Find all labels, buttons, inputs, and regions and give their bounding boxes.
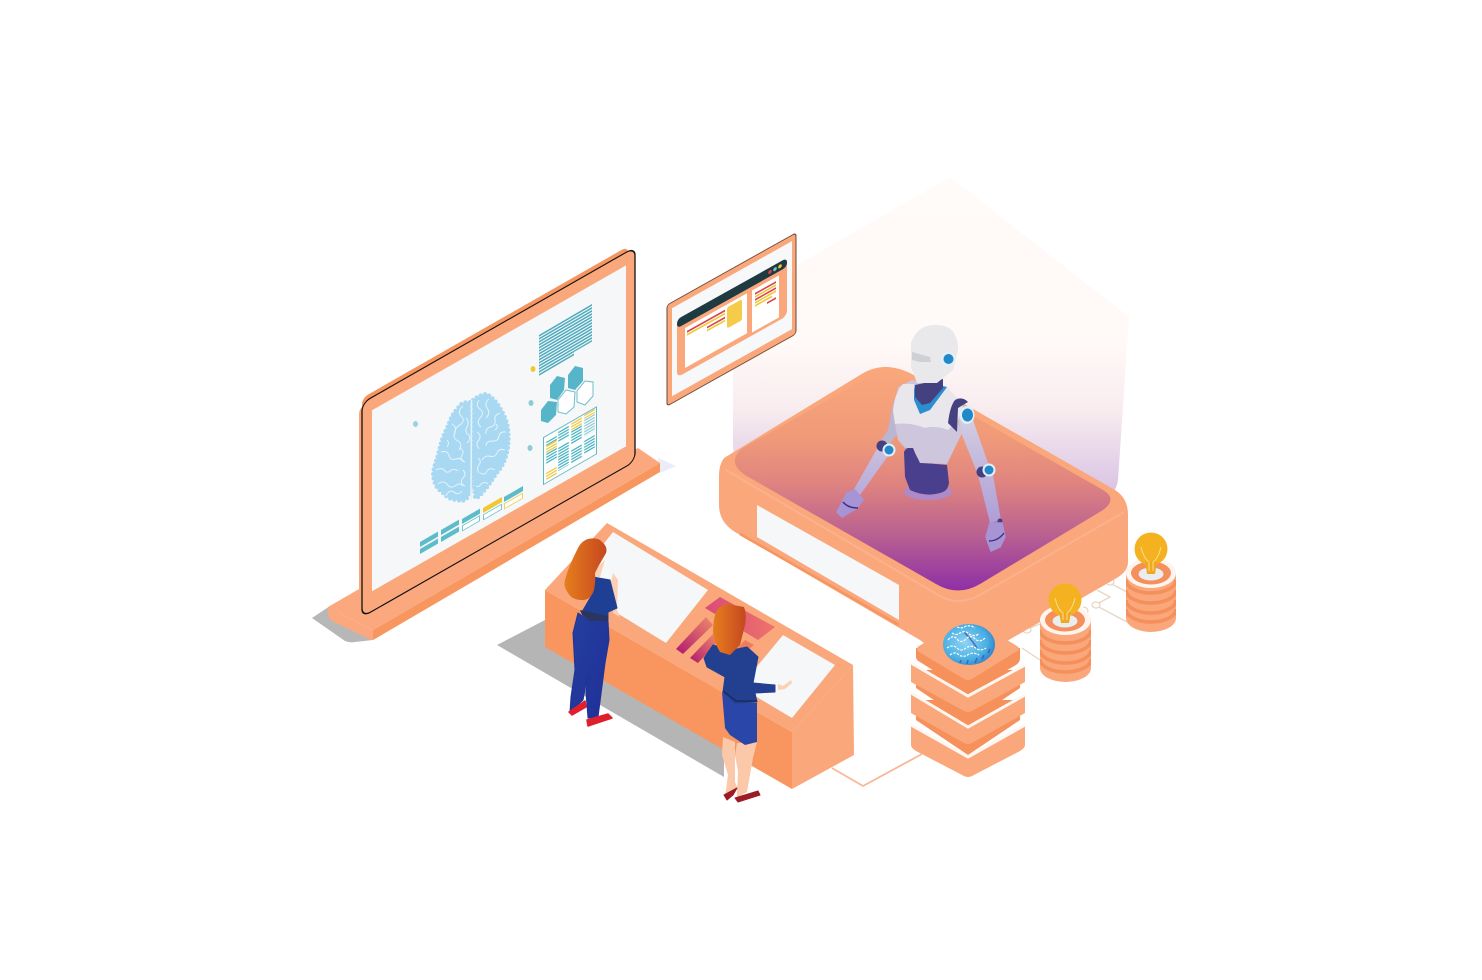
stand front side (373, 463, 660, 640)
desk central bars (676, 617, 754, 663)
window left card lines (687, 311, 725, 342)
robot right wrist (998, 518, 1002, 524)
monitor shadow (312, 606, 373, 642)
desk shadow (497, 620, 724, 777)
woman belt (723, 691, 757, 701)
woman legs (722, 737, 757, 798)
stack second layer (911, 663, 1025, 723)
woman top (582, 577, 617, 620)
stack brain model (943, 624, 995, 665)
monitor (359, 242, 635, 619)
window right content card (752, 275, 779, 332)
monitor hexagon cluster (541, 366, 593, 423)
bulb (1134, 532, 1168, 574)
woman shoes (569, 701, 612, 726)
monitor left outer edge (359, 396, 379, 613)
light bulb pedestal left (1040, 584, 1091, 682)
robot right hand (986, 523, 1005, 551)
stand top face (328, 448, 660, 630)
woman hand (778, 680, 792, 690)
monitor screen (372, 265, 626, 591)
connector line from desk to server stack (832, 754, 922, 786)
pedestal body (1040, 620, 1091, 682)
woman neck and face (593, 560, 605, 577)
light bulb pedestal right (1126, 532, 1176, 632)
display desk (545, 523, 854, 789)
robot left hand (837, 490, 863, 517)
robot elbow joints (876, 440, 996, 478)
hologram light box (733, 177, 1129, 590)
stack top side (916, 648, 1020, 691)
left brain lobe (433, 402, 471, 501)
robot (837, 325, 1005, 551)
woman belt (580, 610, 608, 621)
desk top face (545, 523, 853, 732)
pedestal stripes (1126, 580, 1176, 622)
woman shoes (724, 788, 760, 802)
woman trousers (570, 613, 609, 718)
stand left side (328, 607, 373, 640)
woman raised hand (610, 573, 620, 617)
monitor data table (544, 407, 596, 484)
panel: robot platform (719, 367, 1128, 668)
robot chest highlight (893, 384, 963, 430)
robot abdomen (904, 447, 949, 495)
monitor text block (566, 303, 593, 362)
window yellow note (727, 299, 742, 328)
window control buttons (768, 264, 782, 275)
illustration: isometric AI laboratory (312, 234, 1176, 802)
robot shoulder joint (948, 398, 974, 432)
woman skirt (722, 692, 757, 745)
monitor back edge (362, 246, 628, 428)
platform lower edge stripe (740, 534, 899, 625)
desk central card (705, 597, 775, 640)
stack bottom layer (911, 725, 1025, 777)
window left content card (685, 293, 747, 368)
window inner panel (677, 259, 787, 377)
robot left upper arm (880, 385, 903, 447)
pedestal body (1126, 573, 1176, 632)
bulb (1048, 584, 1082, 623)
woman at desk right (704, 604, 792, 802)
desk left screen (571, 532, 708, 643)
robot left forearm (853, 447, 890, 495)
floating browser window (667, 233, 796, 406)
circuit lines between bulbs and platform (1022, 579, 1127, 660)
monitor brain image (433, 394, 509, 501)
robot collar (914, 385, 947, 414)
woman hair (564, 538, 606, 600)
robot neck (915, 379, 943, 405)
window white area (672, 241, 792, 396)
robot head (911, 325, 958, 383)
stand side shadow (658, 458, 676, 473)
pedestal top ring (1126, 558, 1176, 588)
server stack (911, 618, 1025, 777)
right brain lobe (473, 394, 509, 498)
desk right face (792, 665, 854, 789)
robot visor (912, 352, 931, 362)
desk front face (545, 590, 792, 789)
window right card lines (755, 282, 776, 310)
robot sink hole (904, 484, 952, 500)
pedestal stripes (1040, 630, 1091, 672)
robot torso (893, 380, 964, 464)
woman at desk left (564, 538, 620, 726)
woman jacket (704, 645, 775, 703)
window frame (667, 233, 796, 406)
platform front rim highlight (726, 470, 1124, 601)
monitor bottom bar widgets (420, 486, 523, 554)
platform white label (757, 505, 899, 620)
platform well gradient surface (735, 372, 1110, 590)
brain folds (436, 399, 506, 500)
robot right arm (958, 408, 1001, 523)
pedestal top ring (1040, 605, 1091, 635)
platform body (719, 367, 1128, 668)
monitor frame (362, 247, 635, 617)
stack third layer (911, 693, 1025, 755)
woman hair (713, 604, 746, 655)
stack top face (917, 618, 1019, 680)
robot ear joint (941, 352, 955, 366)
monitor small dots (413, 366, 536, 451)
desk right screen (740, 635, 835, 718)
monitor stand base (328, 448, 676, 640)
window title bar (677, 258, 787, 328)
